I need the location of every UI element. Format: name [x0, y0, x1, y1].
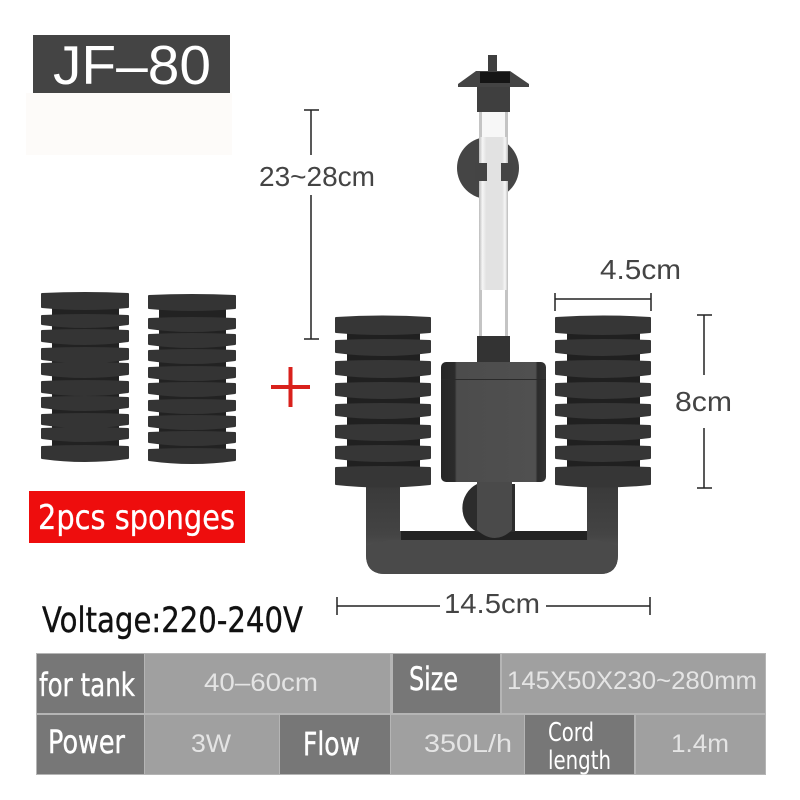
lift neck [477, 336, 510, 366]
lower suction cup [462, 484, 515, 532]
title badge: JF-80 [26, 34, 232, 155]
row 2: power: 3W [191, 730, 231, 758]
row 2: power: Power [48, 723, 126, 761]
lower stem [477, 480, 512, 538]
voltage text: Voltage:220-240V [42, 601, 303, 641]
title badge: JF-80: JF–80 [53, 34, 211, 96]
spare sponge: left [42, 293, 128, 461]
row 1: for tank: 40–60cm [204, 669, 318, 697]
row 2: flow [280, 715, 524, 774]
row 2: cord length: Cord [548, 718, 594, 748]
dimension: sponge width 4.5cm [555, 254, 681, 311]
row 1: for tank: for tank [39, 666, 135, 704]
product: twin sponge filter [336, 55, 650, 574]
dimension: height 23~28cm: 23~28cm [259, 161, 375, 192]
pump body [441, 362, 546, 482]
suction cup: upper [457, 137, 519, 199]
base pipe [366, 487, 618, 574]
row 2: cord length: 1.4m [671, 730, 729, 758]
dimension: overall width 14.5cm [337, 588, 650, 619]
plus sign [271, 367, 310, 407]
dimension: overall width 14.5cm: 14.5cm [444, 588, 540, 619]
row 1: for tank [37, 654, 390, 713]
air outlet cap [458, 55, 529, 112]
main sponge: right [556, 316, 650, 486]
dimension: sponge width 4.5cm: 4.5cm [600, 254, 681, 285]
lift tube [475, 112, 513, 337]
row 1: size [393, 654, 765, 713]
row 2: flow: Flow [303, 725, 360, 763]
row 2: flow: 350L/h [424, 730, 512, 758]
specification table [36, 653, 766, 776]
row 1: size: Size [409, 660, 458, 698]
row 2: power [37, 715, 279, 774]
row 2: cord length: length [548, 746, 611, 776]
dimension: sponge height 8cm [675, 315, 732, 488]
label: 2pcs sponges: 2pcs sponges [38, 498, 235, 538]
dimension: height 23~28cm [259, 110, 375, 339]
row 1: size: 145X50X230~280mm [507, 667, 757, 695]
spare sponge: right [149, 295, 235, 463]
label: 2pcs sponges [29, 491, 245, 543]
row 2: cord length [525, 715, 765, 776]
main sponge: left [336, 316, 430, 486]
dimension: sponge height 8cm: 8cm [675, 386, 732, 417]
